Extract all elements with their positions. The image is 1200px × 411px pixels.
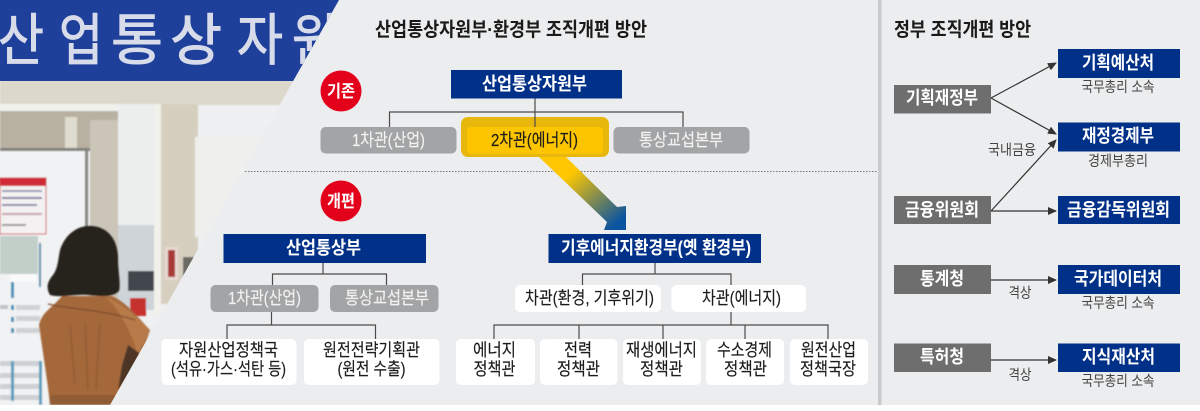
sign: blue ministry signboard: 자 <box>237 9 283 72</box>
box: climate energy environment ministry <box>548 234 761 263</box>
box: trade negotiations office: 통상교섭본부 <box>345 288 429 308</box>
note: deputy prime minister: 경제부총리 <box>1088 153 1148 170</box>
woman seen from behind <box>39 226 150 405</box>
label: domestic finance: 국내금융 <box>988 142 1036 159</box>
org chart: climate energy environment ministry <box>456 234 868 385</box>
sign: blue ministry signboard: 업 <box>59 9 103 72</box>
box: vice minister environment and climate <box>515 285 661 312</box>
box: vice minister energy: 차관(에너지) <box>702 288 781 308</box>
note: under prime minister: 국무총리 소속 <box>1082 373 1154 390</box>
box: 1st vice minister <box>210 285 318 312</box>
box: ministry of finance and economy <box>1058 122 1180 152</box>
arrow: energy moves to climate ministry <box>539 157 626 230</box>
badge: existing: 기존 <box>327 82 355 101</box>
box: energy policy officer <box>456 339 535 385</box>
box: patent office: 특허청 <box>920 347 964 367</box>
box: nuclear strategy planning officer <box>304 339 440 385</box>
box: trade and industry ministry <box>224 234 426 263</box>
box: financial services commission: 금융위원회 <box>905 200 979 220</box>
box: trade negotiations office: 통상교섭본부 <box>639 130 723 150</box>
box: renewable energy policy officer <box>623 339 701 385</box>
arrows: government reorganization flows <box>991 63 1056 360</box>
box: national data office: 국가데이터처 <box>1074 269 1162 289</box>
box: nuclear strategy planning officer: 원전전략기획관 <box>323 340 420 360</box>
box: financial supervisory commission: 금융감독위원회 <box>1067 200 1170 220</box>
dotted divider <box>245 170 878 172</box>
box: statistics korea: 통계청 <box>920 269 964 289</box>
box: patent office <box>894 344 991 372</box>
box: nuclear industry policy director: 원전산업 <box>801 340 856 360</box>
box: trade negotiations office <box>330 285 438 312</box>
badge: existing <box>320 70 362 112</box>
box: resource industry policy bureau: 자원산업정책국 <box>179 340 278 360</box>
sign: blue ministry signboard: 원 <box>292 9 338 72</box>
label: upgraded: 격상 <box>1008 285 1032 302</box>
label: upgraded: 격상 <box>1008 367 1032 384</box>
box: 1st vice minister: 1차관(산업) <box>352 130 425 150</box>
box: ministry of economy and finance <box>894 85 991 114</box>
box: nuclear industry policy director <box>790 339 868 385</box>
box: trade negotiations office <box>614 127 750 154</box>
sign: blue ministry signboard: 통 <box>111 9 163 72</box>
org chart: ministry of trade and industry <box>162 234 440 385</box>
box: planning and budget office: 기획예산처 <box>1082 53 1154 73</box>
box: nuclear strategy planning officer: (원전 수출) <box>338 359 406 379</box>
box: 1st vice minister: 1차관(산업) <box>228 288 301 308</box>
box: hydrogen economy policy officer: 수소경제 <box>717 340 772 360</box>
box: intellectual property office: 지식재산처 <box>1082 347 1155 367</box>
box: 1st vice minister <box>320 127 456 154</box>
sign: blue ministry signboard <box>0 0 340 81</box>
box: energy policy officer: 에너지 <box>473 340 516 360</box>
badge: reorganized: 개편 <box>327 192 355 211</box>
box: planning and budget office <box>1058 49 1180 78</box>
box: trade and industry ministry: 산업통상부 <box>286 238 361 258</box>
box: ministry of trade, industry and resources: 산업통상자원부 <box>482 74 587 94</box>
box: ministry of finance and economy: 재정경제부 <box>1082 126 1154 146</box>
org chart: existing ministry <box>320 70 750 157</box>
box: power policy officer: 정책관 <box>557 359 600 379</box>
box: renewable energy policy officer: 정책관 <box>640 359 683 379</box>
box: climate energy environment ministry: 기후에너지환경부(옛 환경부) <box>561 238 751 258</box>
box: hydrogen economy policy officer: 정책관 <box>724 359 767 379</box>
box: energy policy officer: 정책관 <box>474 359 516 379</box>
box: renewable energy policy officer: 재생에너지 <box>626 340 697 360</box>
title: government reorganization: 정부 조직개편 방안 <box>894 19 1031 41</box>
box: resource industry policy bureau <box>162 339 296 385</box>
box: nuclear industry policy director: 정책국장 <box>800 359 856 379</box>
box: power policy officer: 전력 <box>564 340 592 360</box>
box: vice minister environment and climate: 차관(환경, 기후위기) <box>525 288 654 308</box>
box: intellectual property office <box>1058 344 1180 372</box>
title: ministry reorganization: 산업통상자원부·환경부 조직개편 방안 <box>375 19 647 41</box>
box: statistics korea <box>894 265 991 294</box>
box: ministry of economy and finance: 기획재정부 <box>906 88 978 108</box>
box: national data office <box>1058 265 1180 294</box>
box: resource industry policy bureau: (석유·가스·석탄 등) <box>171 359 286 379</box>
box: hydrogen economy policy officer <box>706 339 784 385</box>
note: under prime minister: 국무총리 소속 <box>1082 295 1154 312</box>
box: ministry of trade, industry and resources <box>451 70 622 98</box>
panel divider <box>878 0 882 405</box>
sign: blue ministry signboard: 상 <box>170 9 222 72</box>
box: 2nd vice minister <box>467 127 603 154</box>
box: power policy officer <box>540 339 618 385</box>
box: financial services commission <box>894 196 991 224</box>
photo: ministry entrance with woman <box>0 0 340 406</box>
note: under prime minister: 국무총리 소속 <box>1082 79 1154 96</box>
box: financial supervisory commission <box>1058 196 1180 224</box>
box: 2nd vice minister: 2차관(에너지) <box>491 130 578 150</box>
box: energy vice minister highlight <box>461 117 609 157</box>
box: vice minister energy <box>672 285 806 312</box>
badge: reorganized <box>320 180 362 222</box>
